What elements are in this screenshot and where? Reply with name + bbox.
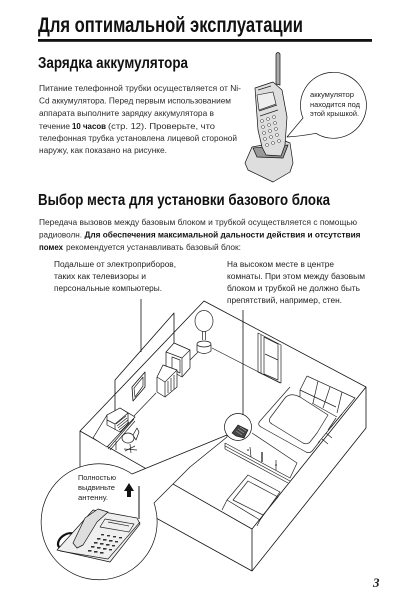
- picture on wall: [132, 372, 145, 401]
- second bed: [222, 475, 280, 526]
- text block: battery charging: Питание телефонной трубки осуществляется от Ni-: [39, 83, 241, 93]
- callout: base unit with antenna: [41, 435, 227, 580]
- text block: battery charging: Cd аккумулятора. Перед первым использованием: [39, 96, 231, 106]
- office chair: [122, 428, 139, 453]
- icon: antenna: [276, 52, 280, 85]
- text block: base unit location: Для обеспечения максимальной дальности действия и отсутствия: [84, 230, 360, 240]
- wall cut-out panel: [115, 313, 174, 412]
- note: away from electronics: таких как телевизоры и: [54, 271, 146, 281]
- base unit phone: [55, 509, 140, 562]
- room shell: [80, 301, 366, 571]
- text block: battery charging: 10 часов: [72, 121, 106, 131]
- note: high place in room centre: блоком и трубкой не должно быть: [227, 283, 361, 293]
- note: away from electronics: [54, 259, 176, 293]
- charger cradle: [253, 145, 288, 158]
- charger base: [245, 141, 293, 182]
- door: [258, 333, 281, 383]
- keypad: [260, 116, 281, 146]
- leader line: high place: [242, 310, 244, 415]
- callout text: антенну.: [78, 493, 108, 502]
- note: high place in room centre: комнаты. При этом между базовым: [227, 271, 365, 281]
- plant: [195, 310, 213, 354]
- text block: base unit location: [39, 217, 360, 252]
- callout: battery cover: этой крышкой.: [310, 109, 359, 118]
- arrow: extend antenna: [124, 483, 134, 497]
- keypad: [88, 534, 122, 554]
- page number: 3: [372, 575, 380, 590]
- sofa: [300, 376, 355, 444]
- title: Для оптимальной эксплуатации: [38, 13, 303, 37]
- coiled cord: [55, 530, 79, 552]
- text block: battery charging: аппарата выполните зарядку аккумулятора в: [39, 108, 214, 118]
- text block: battery charging: телефонная трубка установлена лицевой стороной: [39, 133, 237, 143]
- isometric room illustration: [80, 301, 366, 571]
- text block: battery charging: [39, 83, 241, 155]
- handset: [73, 509, 108, 548]
- desk with computer: [93, 408, 135, 450]
- callout: battery cover: аккумулятор: [310, 90, 354, 99]
- note: high place in room centre: препятствий, например, стен.: [227, 295, 342, 305]
- note: high place in room centre: На высоком месте в центре: [227, 259, 334, 269]
- text block: base unit location: радиоволн.: [39, 230, 82, 240]
- handset body: [255, 82, 287, 156]
- TV on cabinet: [157, 343, 190, 397]
- leader line: electronics: [140, 299, 142, 352]
- note: away from electronics: Подальше от электроприборов,: [54, 259, 176, 269]
- callout: battery cover: находится под: [310, 100, 361, 109]
- handset display: [257, 92, 276, 110]
- note: away from electronics: персональные компьютеры.: [54, 283, 162, 293]
- low table under base unit: [225, 433, 297, 483]
- magnifier: base unit on table: [224, 414, 252, 440]
- callout text: [78, 473, 116, 502]
- display: [100, 519, 134, 532]
- text block: battery charging: (стр. 12). Проверьте, что: [108, 121, 215, 131]
- callout text: выдвиньте: [78, 483, 115, 492]
- text block: base unit location: помех: [39, 242, 63, 252]
- icon: cordless handset in charger: [245, 52, 293, 182]
- heading: base unit location: Выбор места для установки базового блока: [38, 192, 330, 209]
- bed: [259, 387, 328, 453]
- antenna: [138, 486, 140, 519]
- callout text: Полностью: [78, 473, 116, 482]
- earpiece and controls: [258, 86, 278, 116]
- note: high place in room centre: [227, 259, 365, 305]
- heading: battery charging: Зарядка аккумулятора: [38, 55, 188, 72]
- callout: battery cover: [287, 72, 366, 138]
- text block: battery charging: течение: [39, 121, 70, 131]
- text block: base unit location: Передача вызовов между базовым блоком и трубкой осуществляется с помощью: [39, 217, 358, 227]
- text block: base unit location: рекомендуется устанавливать базовый блок:: [66, 242, 241, 252]
- text block: battery charging: наружу, как показано на рисунке.: [39, 145, 167, 155]
